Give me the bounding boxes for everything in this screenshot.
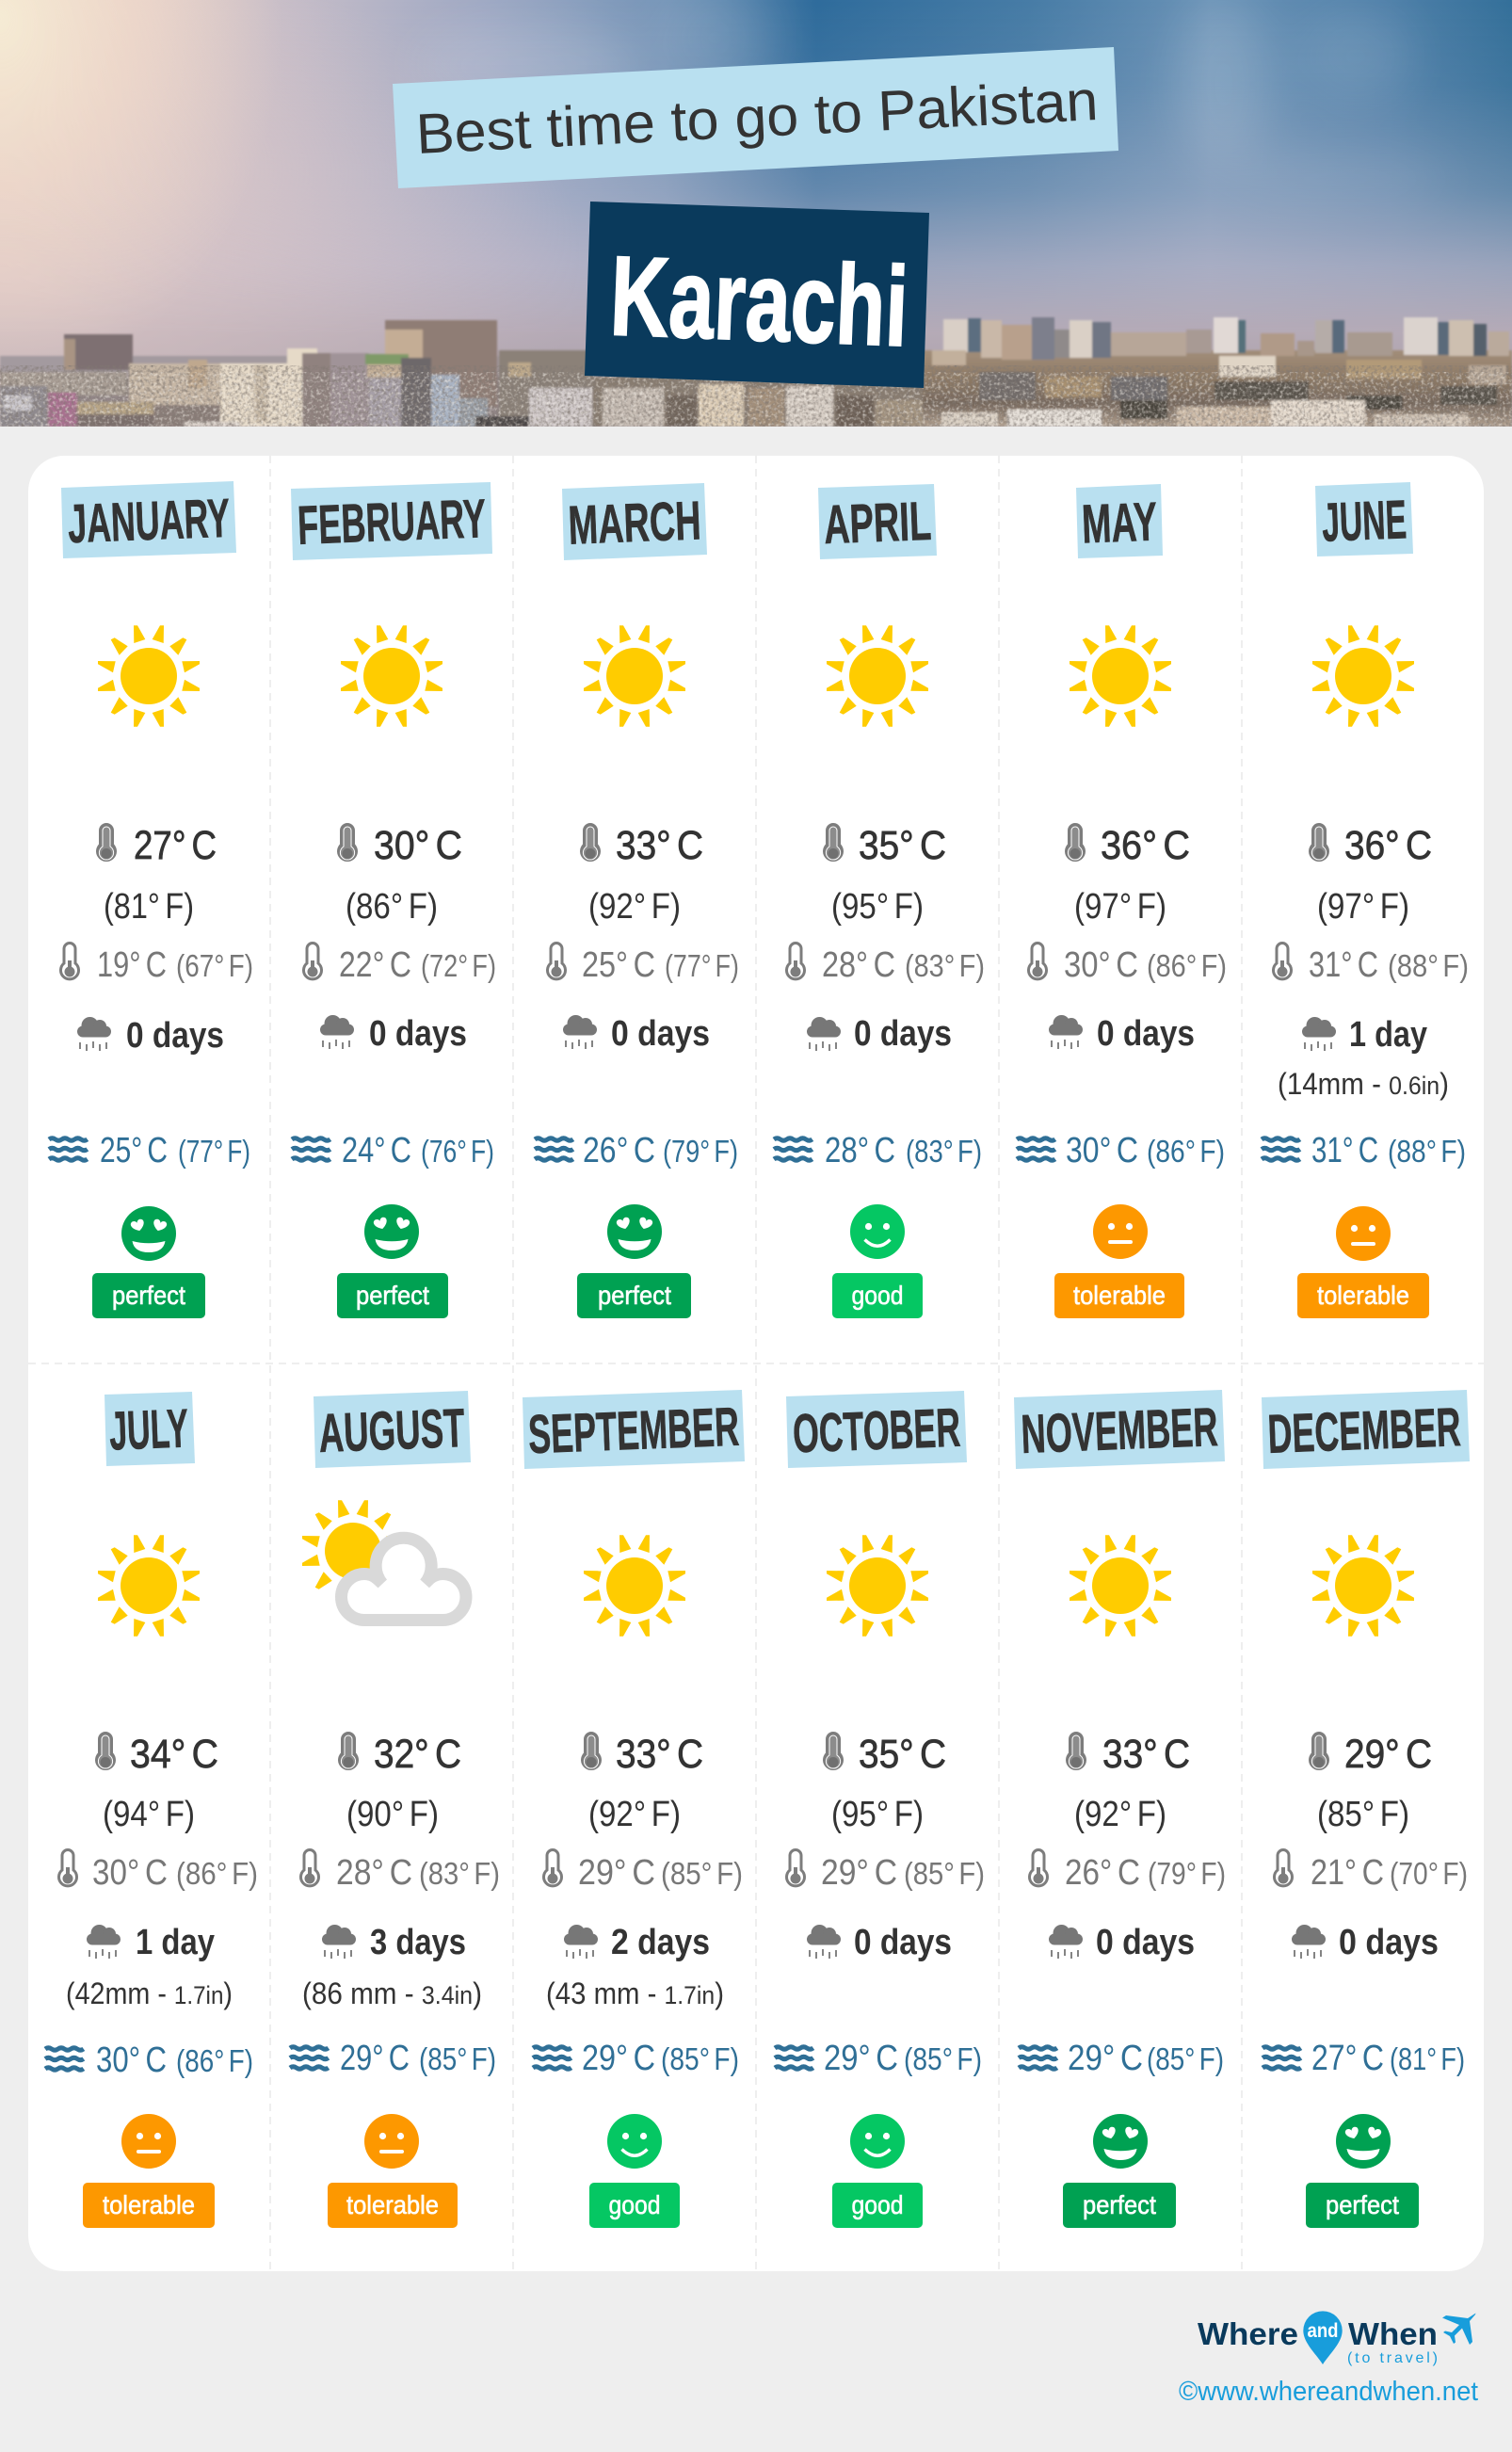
sea temperature [1262,1131,1466,1170]
heading: August: AUGUST [317,1397,466,1464]
high temperature: 36° C [1344,823,1432,868]
low temperature: 30° C [1064,945,1138,985]
rainfall [546,1923,724,2010]
month: October [775,1391,985,2228]
month: March [535,483,739,1318]
low temperature: (85° F) [904,1856,985,1891]
heading: June [1315,482,1413,557]
rainfall [563,1014,710,1054]
icon: sunny [98,625,200,727]
rating: good: good [851,1281,904,1310]
rainfall: 0 days [854,1014,952,1054]
high temperature [580,823,703,927]
icon: sunny [98,1535,200,1637]
high temperature: 34° C [130,1732,218,1777]
sea temperature: (81° F) [1390,2041,1465,2076]
low temperature [301,1849,500,1893]
panel: monthly weather calendar [28,456,1484,2271]
high temperature [1066,1732,1190,1834]
rating: perfect [337,1204,448,1318]
heading: February: FEBRUARY [297,488,487,557]
heading: April [818,484,937,559]
city name banner: Karachi [608,233,910,370]
rating: perfect: perfect [1326,2190,1399,2219]
low temperature [1030,1849,1226,1893]
high temperature: (95° F) [831,1795,924,1834]
icon: sunny [827,1535,928,1637]
high temperature [1309,1732,1432,1834]
icon: sunny [1312,1535,1414,1637]
high temperature: 30° C [374,823,462,868]
low temperature [787,944,985,985]
high temperature: (81° F) [104,887,194,927]
sea temperature: 30° C [1066,1131,1138,1170]
low temperature: (86° F) [1147,948,1227,983]
website credit: ©www.whereandwhen.net [1179,2377,1478,2407]
rainfall: 1 day [1349,1015,1427,1055]
rainfall: 0 days [611,1014,710,1054]
sea temperature: (79° F) [663,1134,738,1169]
sea temperature [535,1131,738,1170]
rating: tolerable: tolerable [346,2190,439,2219]
sea temperature: 29° C [824,2039,898,2078]
logo: Where and When to travel: (to travel) [1347,2350,1438,2366]
rating: tolerable [1054,1204,1184,1318]
rainfall [1278,1015,1449,1101]
heading: July: JULY [108,1397,189,1462]
heading: April: APRIL [823,491,932,556]
sea temperature [533,2039,739,2078]
rating: perfect [577,1204,691,1318]
low temperature [1028,944,1227,985]
low temperature: (79° F) [1148,1856,1226,1891]
low temperature: 26° C [1065,1853,1140,1893]
logo: Where and When to travel: and [1307,2320,1339,2342]
rating: good [832,2114,923,2228]
rainfall: 0 days [854,1923,952,1962]
heading: February [291,482,492,560]
low temperature: 30° C [92,1853,168,1893]
icon: sunny [584,625,685,727]
rating: perfect: perfect [598,1281,671,1310]
rating: good [832,1204,923,1318]
rainfall [77,1016,224,1056]
low temperature [544,1849,743,1893]
sea temperature [290,2039,496,2078]
sea temperature [1017,1131,1225,1170]
low temperature: 22° C [339,945,411,985]
rating: tolerable [328,2114,458,2228]
heading: October: OCTOBER [792,1397,961,1464]
heading: July [105,1392,195,1466]
high temperature: (94° F) [103,1795,195,1834]
title banner: Best time to go to Pakistan [414,69,1100,166]
icon: sunny [1070,1535,1171,1637]
rating: tolerable: tolerable [1317,1281,1409,1310]
sea temperature: (77° F) [178,1134,250,1169]
low temperature: (88° F) [1388,948,1469,983]
rainfall [807,1923,952,1962]
icon: airplane [1442,2313,1476,2345]
low temperature: 31° C [1309,945,1378,985]
rating: tolerable: tolerable [103,2190,195,2219]
heading: November [1014,1390,1225,1469]
month: February [291,482,496,1318]
high temperature: 32° C [374,1732,461,1777]
heading: March: MARCH [567,490,702,557]
rainfall: 2 days [611,1923,710,1962]
high temperature: (95° F) [831,887,924,927]
heading: September: SEPTEMBER [527,1396,740,1465]
sea temperature [49,1131,250,1170]
rainfall: 0 days [1096,1923,1195,1962]
logo: Where and When to travel: Where [1198,2316,1298,2351]
high temperature: (97° F) [1317,887,1409,927]
low temperature: 29° C [821,1853,897,1893]
high temperature [823,823,946,927]
rainfall [807,1014,952,1054]
low temperature: (83° F) [419,1856,500,1891]
low temperature [58,1849,258,1893]
heading: November: NOVEMBER [1020,1396,1219,1465]
high temperature: 29° C [1344,1732,1432,1777]
icon: sun behind cloud [302,1500,466,1620]
low temperature: (86° F) [176,1856,258,1891]
rating: tolerable [83,2114,215,2228]
month: December [1262,1390,1470,2228]
sea temperature: (86° F) [1147,1134,1225,1169]
low temperature: 28° C [822,945,895,985]
low temperature: (83° F) [905,948,985,983]
rating: tolerable: tolerable [1073,1281,1166,1310]
city name banner [585,202,929,388]
month: November [1014,1390,1226,2228]
rainfall [1049,1014,1195,1054]
low temperature [548,944,739,985]
high temperature [1065,823,1190,927]
logo: Where and When to travel [1198,2311,1476,2366]
high temperature: (90° F) [346,1795,439,1834]
rainfall [66,1923,233,2010]
icon: map pin [1303,2311,1343,2364]
high temperature: 33° C [616,823,703,868]
high temperature: (85° F) [1317,1795,1409,1834]
rainfall: 0 days [369,1014,467,1054]
high temperature [1309,823,1432,927]
rainfall: (43 mm - 1.7in) [546,1976,724,2010]
high temperature [581,1732,703,1834]
high temperature: 33° C [1102,1732,1190,1777]
rainfall: (86 mm - 3.4in) [302,1976,482,2010]
sea temperature: 29° C [1068,2039,1143,2078]
sea temperature: (83° F) [906,1134,982,1169]
rating: perfect [1306,2114,1419,2228]
rainfall: 1 day [136,1923,215,1962]
sea temperature: 25° C [100,1131,168,1170]
heading: August [314,1391,471,1468]
sea temperature: 28° C [825,1131,895,1170]
sea temperature [775,2039,982,2078]
heading: June: JUNE [1321,489,1407,554]
sea temperature: (85° F) [661,2041,739,2076]
rating: perfect: perfect [1083,2190,1156,2219]
rating: good: good [608,2190,661,2219]
high temperature [95,1732,218,1834]
sea temperature: 30° C [96,2041,167,2080]
header photo: Karachi skyline under a hazy sky [0,0,1512,427]
high temperature: 27° C [134,823,217,868]
high temperature [337,823,462,927]
icon: sunny [1312,625,1414,727]
month: April [774,484,985,1318]
high temperature: (97° F) [1074,887,1166,927]
heading: March [562,483,707,560]
sea temperature: 24° C [342,1131,411,1170]
rainfall: 3 days [370,1923,466,1962]
month: June [1262,482,1469,1318]
rainfall [320,1014,467,1054]
heading: May [1076,484,1163,558]
rainfall [1292,1923,1439,1962]
title banner [393,47,1118,188]
rating: perfect [92,1206,205,1318]
rainfall [1049,1923,1195,1962]
low temperature: (77° F) [665,948,739,983]
rating: perfect: perfect [112,1281,185,1310]
month: August [290,1391,500,2228]
low temperature [1273,944,1469,985]
heading: September [523,1390,745,1469]
sea temperature [1263,2039,1465,2078]
low temperature: 21° C [1311,1853,1384,1893]
rainfall: 0 days [1097,1014,1195,1054]
high temperature [96,823,217,927]
high temperature [338,1732,461,1834]
rainfall [302,1923,482,2010]
sea temperature: (85° F) [419,2041,496,2076]
low temperature: (72° F) [421,948,496,983]
icon: sunny [584,1535,685,1637]
low temperature: (67° F) [176,948,253,983]
heading: May: MAY [1081,491,1158,556]
sea temperature [45,2041,253,2080]
icon: sunny [1070,625,1171,727]
sea temperature: (76° F) [421,1134,494,1169]
rating: perfect: perfect [356,1281,429,1310]
low temperature [60,944,253,985]
rainfall: (14mm - 0.6in) [1278,1067,1449,1101]
rainfall: 0 days [1339,1923,1439,1962]
month: September [523,1390,745,2228]
high temperature: 33° C [616,1732,703,1777]
sea temperature: 26° C [583,1131,655,1170]
rainfall: (42mm - 1.7in) [66,1976,233,2010]
high temperature: (92° F) [588,1795,681,1834]
low temperature [787,1849,985,1893]
sea temperature: (85° F) [904,2041,982,2076]
rating: good: good [851,2190,904,2219]
month: January [49,481,253,1318]
high temperature [823,1732,946,1834]
heading: October [786,1391,967,1468]
month: July [45,1392,258,2228]
sea temperature: 27° C [1311,2039,1384,2078]
rating: perfect [1063,2114,1176,2228]
rating: tolerable [1297,1206,1429,1318]
low temperature: 29° C [578,1853,655,1893]
logo: Where and When to travel: When [1348,2316,1438,2351]
sea temperature: (88° F) [1388,1134,1466,1169]
high temperature: (92° F) [588,887,681,927]
high temperature: 35° C [859,1732,946,1777]
high temperature: 35° C [859,823,946,868]
heading: January: JANUARY [67,488,231,555]
low temperature: 28° C [336,1853,412,1893]
high temperature: (86° F) [346,887,438,927]
high temperature: 36° C [1101,823,1190,868]
icon: sunny [827,625,928,727]
sea temperature: 29° C [340,2039,410,2078]
sea temperature: (85° F) [1147,2041,1224,2076]
heading: January [61,481,236,558]
month: May [1017,484,1227,1318]
sea temperature [292,1131,494,1170]
rainfall: 0 days [126,1016,224,1056]
low temperature: (70° F) [1390,1856,1468,1891]
low temperature [303,944,496,985]
sea temperature: 29° C [582,2039,655,2078]
low temperature [1275,1849,1468,1893]
sea temperature: (86° F) [176,2043,253,2078]
low temperature: 19° C [97,945,167,985]
icon: sunny [341,625,442,727]
high temperature: (92° F) [1074,1795,1166,1834]
low temperature: 25° C [582,945,655,985]
sea temperature [774,1131,982,1170]
sea temperature [1019,2039,1224,2078]
rating: good [589,2114,680,2228]
low temperature: (85° F) [661,1856,743,1891]
sea temperature: 31° C [1311,1131,1378,1170]
